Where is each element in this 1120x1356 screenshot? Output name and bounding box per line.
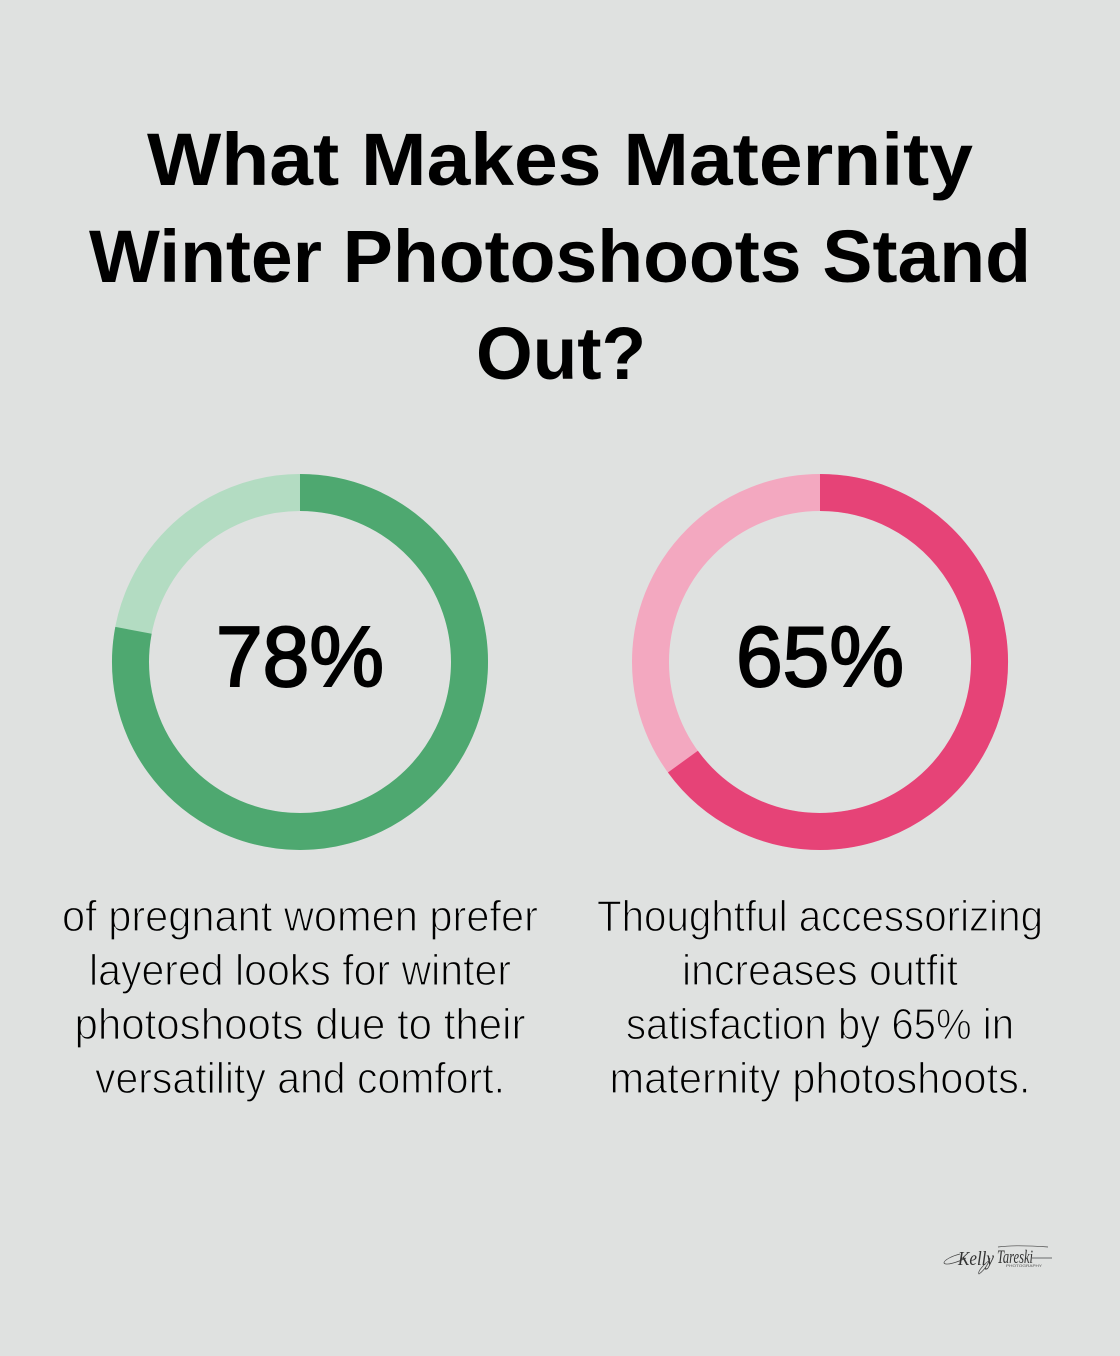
title: What Makes Maternity [147,118,973,201]
description: layered looks: photoshoots due to their [74,1000,526,1049]
panel: 65% statistic [597,492,1043,1103]
description: accessorizing [597,892,1043,1103]
logo: Kelly & Tareski Photography signature: PHOTOGRAPHY [1006,1263,1042,1268]
logo: Kelly & Tareski Photography signature [944,1246,1052,1274]
donut chart: 78% [130,492,470,832]
value: 78%: 78% [216,610,384,705]
description: accessorizing: maternity photoshoots. [610,1054,1030,1103]
description: layered looks: versatility and comfort. [95,1054,505,1103]
description: accessorizing: satisfaction by 65% in [626,1000,1014,1049]
description: accessorizing: Thoughtful accessorizing [597,892,1043,941]
title: Winter Photoshoots Stand [89,215,1031,298]
value: 65%: 65% [736,610,904,705]
donut chart: 65% [650,492,990,832]
description: layered looks [62,892,538,1103]
title [89,118,1031,395]
title: Out? [476,312,646,395]
description: accessorizing: increases outfit [682,946,958,995]
logo: Kelly & Tareski Photography signature: Tareski [997,1247,1033,1268]
description: layered looks: of pregnant women prefer [62,892,538,941]
logo: Kelly & Tareski Photography signature: Kelly [957,1248,994,1270]
panel: 78% statistic [62,492,538,1103]
description: layered looks: layered looks for winter [89,946,511,995]
